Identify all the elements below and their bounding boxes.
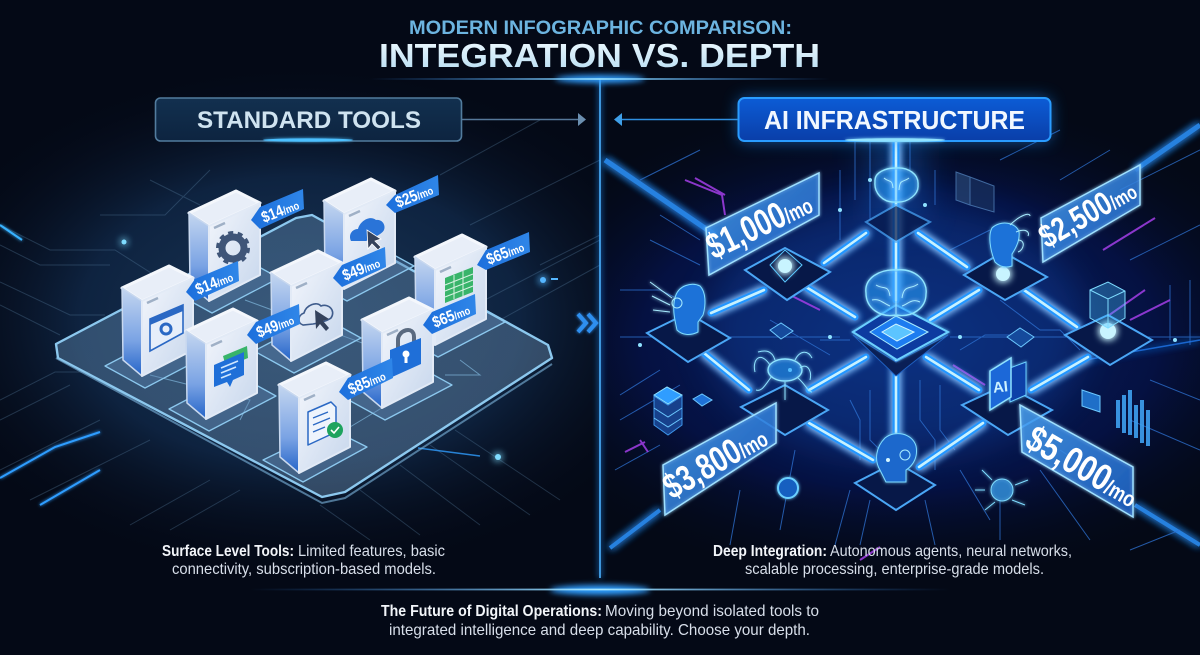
icon: blue cloud with cursor (350, 218, 385, 250)
price tag: $25/mo (386, 175, 439, 213)
icon: right AI head (990, 214, 1030, 267)
arrow: AI infrastructure to center (614, 113, 738, 126)
price tag: $14/mo top: $14/mo (259, 196, 302, 227)
node: bottom processor (855, 462, 935, 510)
price tag: $3,800/mo: $3,800/mo (656, 415, 774, 507)
price tag: $85/mo (339, 358, 393, 400)
panel: AI infrastructure background (601, 90, 1200, 590)
price tag: $65/mo lower: $65/mo (430, 301, 473, 332)
tool box: spreadsheet (415, 235, 486, 345)
node: top center plate (866, 205, 930, 242)
text: future of digital operations: Moving beyond isolated tools to (605, 603, 819, 620)
icon: settings window (150, 305, 183, 351)
icon: bottom AI head (877, 434, 917, 482)
price tag: $49/mo upper (333, 247, 386, 287)
node: small chip right (1007, 328, 1034, 347)
node: top left processor (745, 248, 830, 300)
icon: top brain (875, 168, 918, 202)
icon: document with check (308, 402, 343, 445)
price tag: $5,000/mo: $5,000/mo (1019, 417, 1147, 515)
node: bottom right processor (962, 385, 1052, 435)
icon: gear (218, 233, 248, 263)
icon: chat bubble (214, 346, 248, 387)
icon: outline cloud with cursor (299, 304, 333, 331)
icon: spider brain (754, 351, 812, 400)
chart: right bars (1116, 390, 1150, 446)
heading: AI infrastructure: AI INFRASTRUCTURE (764, 105, 1025, 135)
heading: AI infrastructure (738, 98, 1050, 142)
text: deep integration: scalable processing, enterprise-grade models. (745, 561, 1044, 578)
arrow: standard tools to center (462, 113, 586, 126)
icon: top server rack (956, 172, 994, 212)
tool box: cloud upload (324, 179, 395, 289)
icon: AI card (990, 358, 1026, 410)
icon: padlock (390, 330, 421, 378)
pads under tool boxes (105, 244, 505, 482)
price tag: $1,000/mo: $1,000/mo (700, 181, 818, 267)
text: surface level tools: connectivity, subscription-based models. (172, 561, 436, 578)
price tag: $14/mo top (251, 189, 304, 229)
text: deep integration: Autonomous agents, neural networks, (830, 543, 1072, 560)
panel: standard tools background (0, 60, 600, 600)
node: top right processor (964, 252, 1047, 300)
center divider (598, 79, 602, 578)
text: deep integration (713, 543, 1072, 578)
icon: green spreadsheet (445, 267, 473, 303)
price tag: $49/mo upper: $49/mo (340, 254, 383, 285)
price tag: $49/mo lower: $49/mo (254, 311, 297, 342)
text: future of digital operations: integrated intelligence and deep capability. Choose your depth. (389, 622, 810, 639)
light rays (605, 125, 1200, 548)
central chip (853, 305, 948, 376)
tool box: document (279, 363, 350, 473)
icon: small monitor (1082, 390, 1100, 412)
price tag: $65/mo upper: $65/mo (484, 238, 527, 269)
glass platform (56, 215, 552, 503)
icon: bottom left disc (778, 478, 798, 498)
node: small chip left (770, 323, 793, 339)
tool box: window settings (122, 266, 193, 376)
text: future of digital operations (381, 603, 819, 639)
price tag: $14/mo lower (186, 261, 239, 301)
text: future of digital operations: The Future of Digital Operations: (381, 603, 602, 620)
tool box: lock (362, 298, 433, 408)
circuit nodes (647, 205, 1152, 510)
price tag: $14/mo lower: $14/mo (193, 268, 236, 299)
price tag: $85/mo: $85/mo (346, 367, 388, 399)
price tag: $25/mo: $25/mo (393, 181, 436, 212)
text: deep integration: Deep Integration: (713, 543, 827, 560)
icon: bottom right brain network (975, 470, 1028, 510)
title underline (370, 75, 830, 83)
neural network main connections (704, 140, 1088, 467)
tool box: outline cloud (271, 251, 342, 361)
icon: stacked servers (654, 387, 712, 435)
price tag: $2,500/mo: $2,500/mo (1032, 170, 1142, 255)
price tag: $49/mo lower (247, 304, 300, 344)
node: right processor (1065, 282, 1152, 365)
tool box: gear (189, 191, 260, 301)
circuit traces (615, 130, 1200, 560)
icon: center chevrons (578, 314, 596, 332)
title: INTEGRATION VS. DEPTH (379, 37, 820, 74)
icon: central brain (866, 270, 926, 316)
bottom divider (250, 585, 950, 595)
node: bottom left processor (741, 385, 828, 435)
text: surface level tools: Limited features, basic (298, 543, 445, 560)
text: surface level tools: Surface Level Tools: (162, 543, 294, 560)
title eyebrow: MODERN INFOGRAPHIC COMPARISON: (409, 17, 792, 39)
price tag: $65/mo lower (423, 294, 476, 334)
heading: standard tools: STANDARD TOOLS (197, 107, 421, 134)
tool box: chat (186, 309, 257, 419)
price tag: $65/mo upper (477, 232, 530, 270)
icon: AI card: AI (992, 378, 1009, 397)
heading: standard tools (156, 98, 462, 142)
icon: left AI head (650, 282, 705, 334)
node: left processor (647, 313, 730, 362)
text: surface level tools (162, 543, 445, 578)
